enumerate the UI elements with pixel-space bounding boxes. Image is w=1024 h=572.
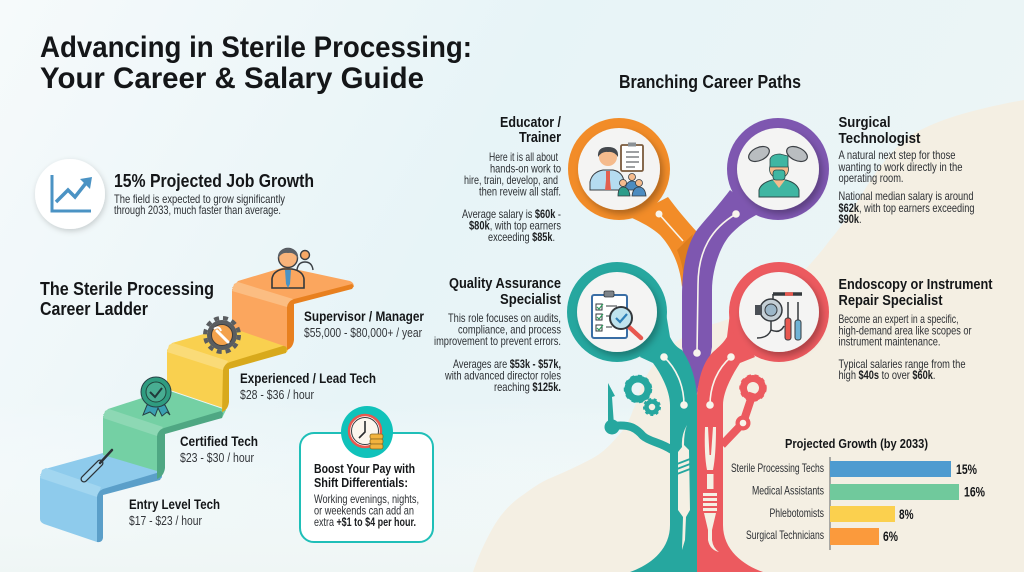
label: experienced: $28 - $36 / hour bbox=[240, 387, 315, 402]
bar: surgical technicians: Surgical Technicians bbox=[746, 528, 824, 542]
title bbox=[40, 31, 472, 95]
text: educator bbox=[462, 115, 561, 244]
bar: surgical technicians bbox=[746, 528, 898, 545]
bar: sterile processing techs: 15% bbox=[956, 461, 977, 477]
text: educator: $80k, with top earners bbox=[469, 218, 561, 232]
text: educator: then reveiw all staff. bbox=[479, 184, 561, 198]
icon: educator bbox=[578, 128, 660, 210]
stat description bbox=[114, 192, 285, 217]
callout body: Working evenings, nights, bbox=[314, 492, 419, 506]
step: certified bbox=[103, 390, 226, 479]
bar: phlebotomists bbox=[770, 506, 914, 522]
callout body bbox=[314, 492, 419, 529]
icon: supervisor people bbox=[272, 248, 313, 288]
icon: gear and wrench bbox=[205, 318, 239, 352]
bar: sterile processing techs bbox=[731, 461, 977, 477]
label: certified bbox=[180, 433, 258, 465]
text: surgical technologist: $62k, with top earners exceeding bbox=[838, 201, 974, 215]
label: entry level: Entry Level Tech bbox=[129, 496, 220, 512]
text: educator: exceeding $85k. bbox=[488, 230, 555, 244]
text: surgical technologist: National median salary is around bbox=[838, 189, 974, 203]
text: surgical technologist: Surgical bbox=[838, 115, 890, 131]
label: supervisor: $55,000 - $80,000+ / year bbox=[304, 325, 423, 340]
text: surgical technologist: wanting to work directly in the bbox=[838, 160, 963, 174]
bar: medical assistants: Medical Assistants bbox=[752, 484, 824, 498]
text: quality assurance bbox=[434, 276, 561, 394]
callout body: or weekends can add an bbox=[314, 504, 414, 518]
label: certified: Certified Tech bbox=[180, 433, 258, 449]
text: quality assurance: Averages are $53k - $57k, bbox=[453, 357, 561, 371]
step: supervisor bbox=[232, 267, 354, 350]
step: experienced bbox=[167, 326, 290, 412]
text: quality assurance: Specialist bbox=[500, 292, 561, 308]
label: supervisor bbox=[304, 308, 424, 340]
text: quality assurance: with advanced director roles bbox=[444, 368, 561, 382]
staircase bbox=[40, 267, 354, 542]
text: endoscopy specialist bbox=[838, 277, 993, 382]
ladder labels bbox=[129, 308, 424, 528]
chart title: Projected Growth (by 2033) bbox=[785, 436, 928, 451]
label: experienced bbox=[240, 370, 376, 402]
text: endoscopy specialist: instrument maintenance. bbox=[838, 334, 940, 348]
bar: sterile processing techs: Sterile Processing Techs bbox=[731, 461, 824, 475]
branch: quality assurance trunk bbox=[567, 262, 697, 572]
text: surgical technologist: operating room. bbox=[838, 171, 904, 185]
text: endoscopy specialist: Become an expert in a specific, bbox=[838, 312, 958, 326]
text: educator: hire, train, develop, and bbox=[464, 173, 558, 187]
career ladder heading: Career Ladder bbox=[40, 299, 148, 319]
text: quality assurance: improvement to prevent errors. bbox=[434, 334, 561, 348]
icon: surgical instrument bbox=[84, 450, 112, 479]
career ladder heading bbox=[40, 279, 214, 319]
text: endoscopy specialist: Endoscopy or Instrument bbox=[838, 277, 993, 293]
text: educator: Trainer bbox=[519, 130, 561, 146]
bar: surgical technicians: 6% bbox=[883, 528, 898, 544]
icon: clock and coins bbox=[341, 406, 393, 458]
text: quality assurance: Quality Assurance bbox=[449, 276, 561, 292]
text: surgical technologist bbox=[838, 115, 974, 226]
branch: educator bbox=[568, 118, 697, 287]
bar: phlebotomists: 8% bbox=[899, 506, 914, 522]
icon: surgeon bbox=[737, 128, 819, 210]
branch: surgical technologist bbox=[682, 118, 829, 395]
icon: endoscope tools bbox=[739, 272, 819, 352]
icon: certification badge bbox=[141, 377, 171, 416]
panel: job growth stat bbox=[35, 159, 314, 229]
text: educator: Average salary is $60k - bbox=[462, 207, 561, 221]
callout: shift differentials bbox=[300, 406, 433, 542]
label: entry level bbox=[129, 496, 220, 528]
branching heading: Branching Career Paths bbox=[619, 72, 801, 92]
text: endoscopy specialist: high-demand area like scopes or bbox=[838, 324, 972, 338]
bar: medical assistants bbox=[752, 484, 985, 500]
branch: endoscopy trunk bbox=[697, 262, 829, 572]
label: supervisor: Supervisor / Manager bbox=[304, 308, 424, 324]
icon: growth chart bbox=[35, 159, 105, 229]
callout body: extra +$1 to $4 per hour. bbox=[314, 515, 416, 529]
stat heading: 15% Projected Job Growth bbox=[114, 171, 314, 191]
title: Your Career & Salary Guide bbox=[40, 62, 424, 95]
text: surgical technologist: A natural next step for those bbox=[838, 148, 956, 162]
text: surgical technologist: $90k. bbox=[838, 212, 862, 226]
callout heading: Boost Your Pay with bbox=[314, 462, 415, 476]
text: surgical technologist: Technologist bbox=[838, 131, 921, 147]
icon: quality clipboard bbox=[577, 272, 657, 352]
text: quality assurance: reaching $125k. bbox=[494, 380, 561, 394]
text: endoscopy specialist: high $40s to over $60k. bbox=[838, 368, 936, 382]
bar chart: projected growth bbox=[731, 436, 985, 550]
career ladder heading: The Sterile Processing bbox=[40, 279, 214, 299]
step: entry level bbox=[40, 453, 162, 542]
label: certified: $23 - $30 / hour bbox=[180, 450, 255, 465]
callout heading: Shift Differentials: bbox=[314, 476, 408, 490]
stat description: through 2033, much faster than average. bbox=[114, 203, 281, 217]
label: experienced: Experienced / Lead Tech bbox=[240, 370, 376, 386]
text: educator: Here it is all about bbox=[489, 150, 558, 164]
text: quality assurance: This role focuses on audits, bbox=[448, 311, 561, 325]
stat description: The field is expected to grow significantly bbox=[114, 192, 285, 206]
text: educator: Educator / bbox=[500, 115, 561, 131]
bar: phlebotomists: Phlebotomists bbox=[770, 506, 824, 520]
branching tree bbox=[567, 118, 829, 572]
callout heading bbox=[314, 462, 415, 490]
text: quality assurance: compliance, and process bbox=[458, 322, 561, 336]
bar: medical assistants: 16% bbox=[964, 484, 985, 500]
text: endoscopy specialist: Repair Specialist bbox=[838, 293, 943, 309]
text: educator: hands-on work to bbox=[490, 162, 561, 176]
title: Advancing in Sterile Processing: bbox=[40, 31, 472, 64]
label: entry level: $17 - $23 / hour bbox=[129, 513, 203, 528]
text: endoscopy specialist: Typical salaries range from the bbox=[838, 357, 966, 371]
